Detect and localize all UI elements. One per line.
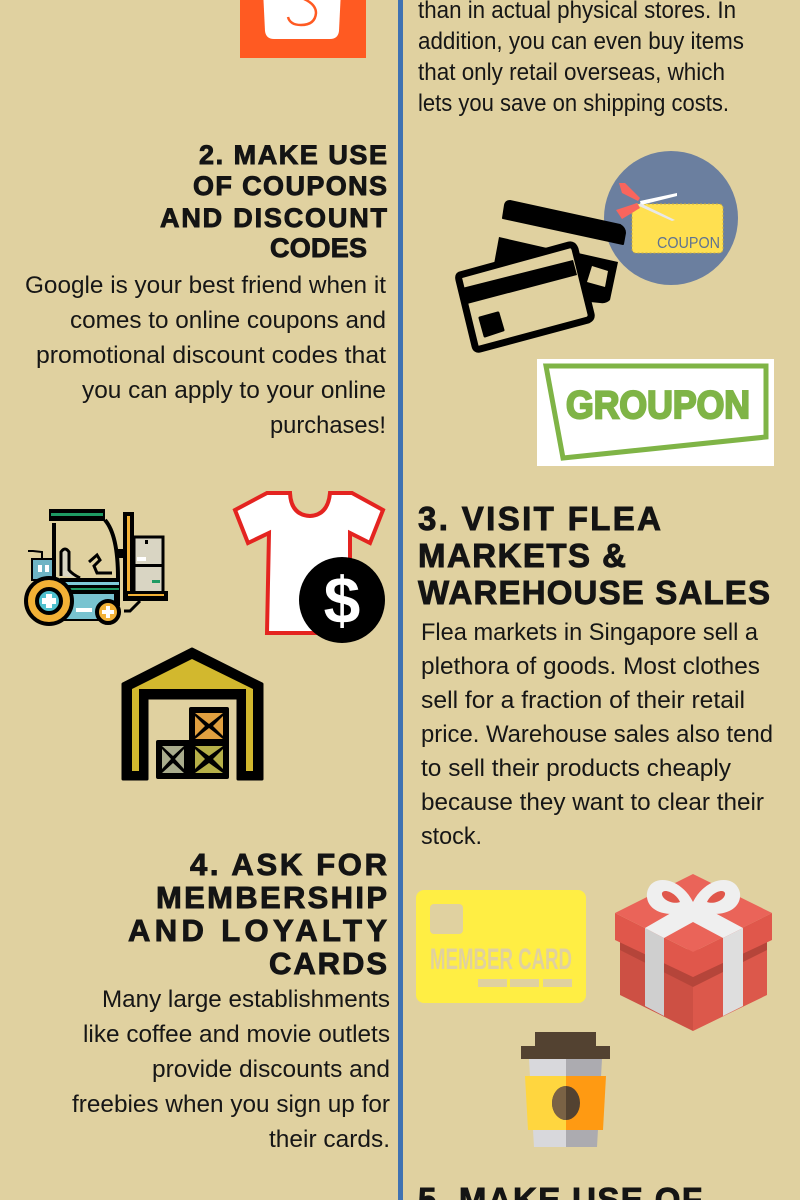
icon: member card: MEMBER CARD <box>430 943 572 976</box>
icon: gift box <box>615 874 772 1031</box>
text block: flea markets <box>421 619 773 850</box>
heading: make use of coupons: AND DISCOUNT <box>160 203 388 233</box>
text block: coupons: promotional discount codes that <box>36 342 386 369</box>
text block: coupons: purchases! <box>270 412 386 439</box>
logo: Groupon: GROUPON <box>566 384 750 427</box>
text block: flea markets: because they want to clear their <box>421 789 764 816</box>
heading: visit flea markets <box>418 500 770 611</box>
icon: member card <box>416 890 586 1003</box>
icon: shopping bag logo <box>240 0 366 58</box>
icon: warehouse <box>123 649 262 779</box>
icon: t-shirt with dollar <box>235 493 385 643</box>
text block: flea markets: price. Warehouse sales also tend <box>421 721 773 748</box>
heading: membership and loyalty cards: CARDS <box>269 946 387 981</box>
heading: visit flea markets: 3. VISIT FLEA <box>418 500 661 537</box>
text block: flea markets: sell for a fraction of their retail <box>421 687 745 714</box>
heading: membership and loyalty cards <box>128 847 387 981</box>
heading: make use of coupons <box>160 140 388 263</box>
text block: loyalty cards: Many large establishments <box>102 986 390 1013</box>
heading: make use of coupons: CODES <box>270 233 367 263</box>
heading: make use of coupons: 2. MAKE USE <box>199 140 387 170</box>
icon: coupon and scissors <box>604 151 738 285</box>
heading: make use of coupons: OF COUPONS <box>193 171 387 201</box>
icon: t-shirt with dollar: $ <box>324 563 360 637</box>
icon: forklift <box>26 509 168 624</box>
text block: online stores intro: addition, you can even buy items <box>418 28 744 55</box>
heading: membership and loyalty cards: AND LOYALTY <box>128 913 387 948</box>
text block: flea markets: to sell their products cheaply <box>421 755 732 782</box>
text block: coupons: Google is your best friend when it <box>25 272 386 299</box>
text block: online stores intro <box>418 0 744 117</box>
text block: flea markets: stock. <box>421 823 482 850</box>
text block: coupons <box>25 272 386 439</box>
heading: visit flea markets: WAREHOUSE SALES <box>418 574 770 611</box>
text block: loyalty cards: freebies when you sign up for <box>72 1091 390 1118</box>
text block: coupons: you can apply to your online <box>82 377 386 404</box>
text block: loyalty cards <box>72 986 390 1153</box>
text block: coupons: comes to online coupons and <box>70 307 386 334</box>
text block: loyalty cards: like coffee and movie outlets <box>83 1021 390 1048</box>
heading: membership and loyalty cards: MEMBERSHIP <box>156 880 387 915</box>
text block: online stores intro: lets you save on shipping costs. <box>418 90 729 117</box>
logo: Groupon <box>537 359 774 466</box>
text block: loyalty cards: their cards. <box>269 1126 390 1153</box>
icon: coupon and scissors: COUPON <box>657 235 720 252</box>
heading: visit flea markets: MARKETS & <box>418 537 626 574</box>
text block: online stores intro: that only retail overseas, which <box>418 59 725 86</box>
text block: flea markets: Flea markets in Singapore sell a <box>421 619 758 646</box>
icon: credit cards <box>459 201 625 349</box>
heading: membership and loyalty cards: 4. ASK FOR <box>190 847 387 882</box>
text block: loyalty cards: provide discounts and <box>152 1056 390 1083</box>
icon: coffee cup <box>521 1032 610 1147</box>
text block: flea markets: plethora of goods. Most clothes <box>421 653 760 680</box>
